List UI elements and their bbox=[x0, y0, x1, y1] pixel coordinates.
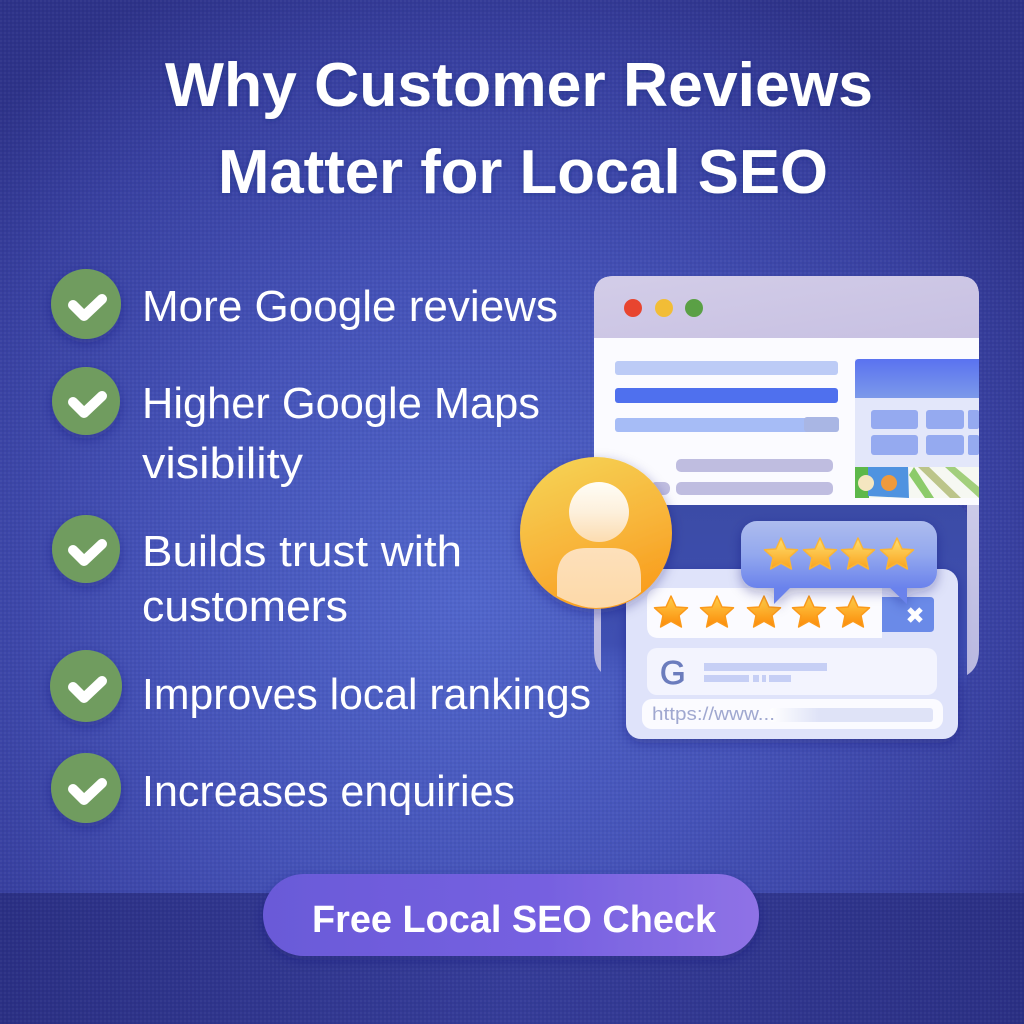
item: Higher Google Maps visibility bbox=[52, 367, 540, 488]
Google row: G bbox=[660, 654, 686, 691]
speech bubble with four stars bbox=[741, 521, 937, 604]
lower dark panel bbox=[601, 505, 967, 690]
browser window bbox=[594, 276, 979, 690]
URL bar bbox=[642, 699, 943, 729]
item: Builds trust with customers bbox=[52, 515, 462, 631]
window title bar bbox=[594, 276, 979, 338]
map listing panel bbox=[855, 359, 979, 467]
call to action button: Free Local SEO Check bbox=[312, 899, 717, 941]
review card bbox=[626, 569, 958, 739]
item: More Google reviews: More Google reviews bbox=[142, 282, 558, 331]
item: Increases enquiries bbox=[51, 753, 515, 823]
Google row bbox=[647, 648, 937, 695]
URL bar: https://www... bbox=[652, 704, 775, 724]
item: Higher Google Maps visibility: visibility bbox=[142, 439, 303, 488]
item: Improves local rankings bbox=[50, 650, 591, 722]
checklist bbox=[50, 269, 591, 823]
title: Why Customer Reviews bbox=[165, 51, 873, 120]
map thumbnail bbox=[855, 467, 979, 498]
title: Matter for Local SEO bbox=[218, 138, 828, 207]
five star rating row bbox=[647, 588, 882, 638]
item: Builds trust with customers: customers bbox=[142, 582, 348, 631]
avatar icon bbox=[520, 457, 672, 609]
call to action button bbox=[263, 874, 759, 956]
close button bbox=[882, 597, 934, 632]
item: Increases enquiries: Increases enquiries bbox=[142, 767, 515, 816]
item: More Google reviews bbox=[51, 269, 558, 339]
item: Higher Google Maps visibility: Higher Google Maps bbox=[142, 379, 540, 428]
window frame bbox=[594, 276, 979, 675]
search result bars bbox=[615, 361, 839, 495]
title bbox=[165, 51, 873, 207]
item: Improves local rankings: Improves local rankings bbox=[142, 670, 591, 719]
item: Builds trust with customers: Builds trust with bbox=[142, 527, 462, 576]
